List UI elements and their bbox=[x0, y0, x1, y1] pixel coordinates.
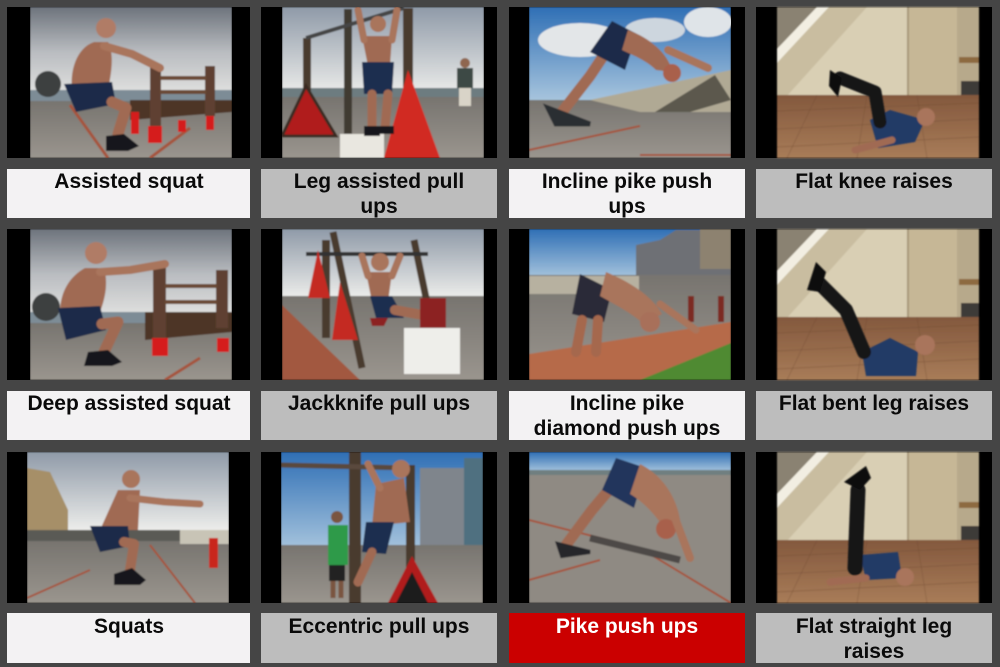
photo: leg assisted pull ups bbox=[261, 7, 497, 158]
photo: deep assisted squat bbox=[7, 229, 250, 380]
label: Assisted squat: Assisted squat bbox=[54, 170, 204, 193]
label: Flat knee raises: Flat knee raises bbox=[795, 170, 953, 193]
label: Leg assisted pull ups: ups bbox=[360, 195, 398, 218]
photo: incline pike push ups bbox=[509, 7, 745, 158]
label: Pike push ups bbox=[509, 613, 745, 663]
label: Assisted squat bbox=[7, 169, 250, 218]
label: Leg assisted pull ups bbox=[261, 169, 497, 218]
label: Incline pike push ups bbox=[509, 169, 745, 218]
photo: flat knee raises bbox=[756, 7, 992, 158]
label: Flat knee raises bbox=[756, 169, 992, 218]
photo: eccentric pull ups bbox=[261, 452, 497, 603]
photo: incline pike diamond push ups bbox=[509, 229, 745, 380]
label: Eccentric pull ups bbox=[261, 613, 497, 663]
photo: flat straight leg raises bbox=[756, 452, 992, 603]
label: Incline pike diamond push ups bbox=[509, 391, 745, 440]
photo: assisted squat bbox=[7, 7, 250, 158]
label: Jackknife pull ups: Jackknife pull ups bbox=[288, 392, 470, 415]
label: Incline pike diamond push ups: Incline pike bbox=[570, 392, 684, 415]
label: Leg assisted pull ups: Leg assisted pull bbox=[294, 170, 464, 193]
label: Squats: Squats bbox=[94, 615, 164, 638]
label: Pike push ups: Pike push ups bbox=[556, 615, 698, 638]
label: Deep assisted squat bbox=[7, 391, 250, 440]
label: Eccentric pull ups: Eccentric pull ups bbox=[289, 615, 469, 638]
label: Incline pike diamond push ups: diamond push ups bbox=[534, 417, 720, 440]
label: Squats bbox=[7, 613, 250, 663]
photo: flat bent leg raises bbox=[756, 229, 992, 380]
label: Flat straight leg raises: Flat straight leg bbox=[796, 615, 952, 638]
label: Incline pike push ups: ups bbox=[608, 195, 646, 218]
photo: squats bbox=[7, 452, 250, 603]
label: Incline pike push ups: Incline pike push bbox=[542, 170, 712, 193]
label: Jackknife pull ups bbox=[261, 391, 497, 440]
label: Flat bent leg raises bbox=[756, 391, 992, 440]
label: Flat straight leg raises bbox=[756, 613, 992, 663]
photo: pike push ups bbox=[509, 452, 745, 603]
label: Deep assisted squat: Deep assisted squat bbox=[27, 392, 231, 415]
label: Flat straight leg raises: raises bbox=[844, 640, 904, 663]
label: Flat bent leg raises: Flat bent leg raises bbox=[779, 392, 969, 415]
photo: jackknife pull ups bbox=[261, 229, 497, 380]
